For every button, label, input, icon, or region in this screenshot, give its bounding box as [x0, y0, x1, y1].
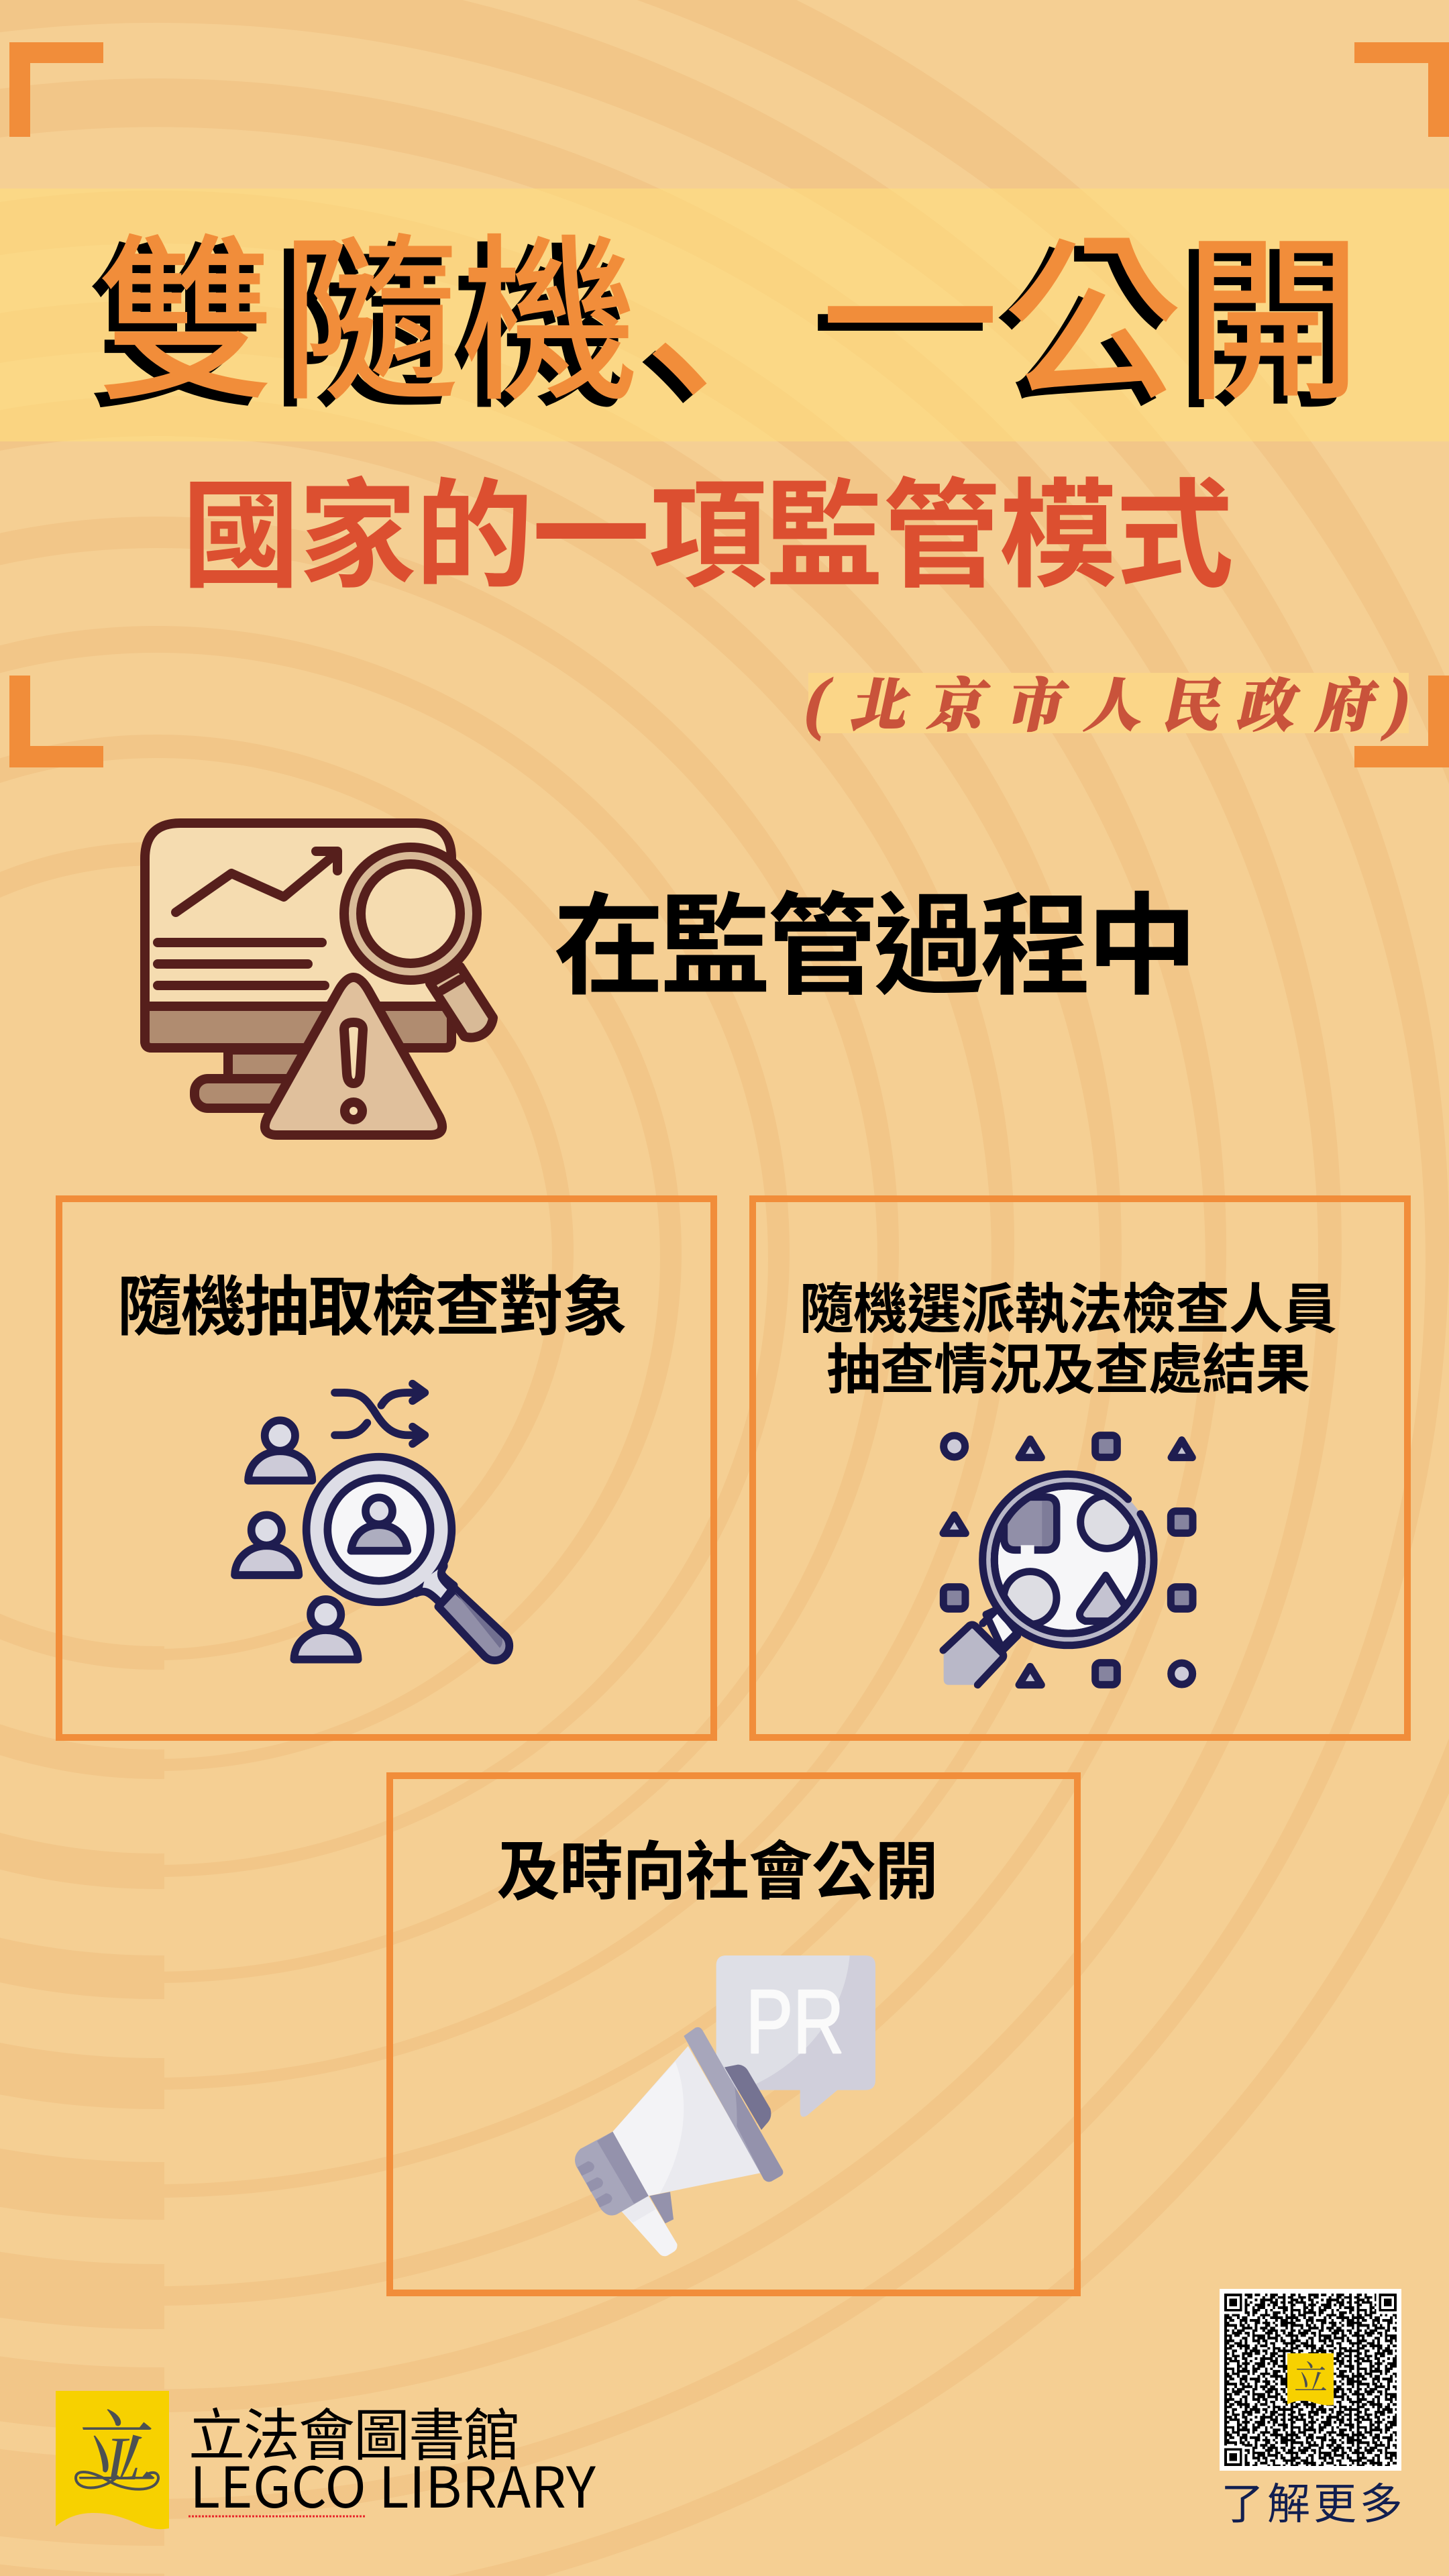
panel: timely public disclosure [390, 1776, 1077, 2293]
source callout: Beijing government: ) [1379, 663, 1418, 741]
subtitle: 國家的一項監管模式 [182, 471, 1234, 602]
corner bracket: top right [1354, 42, 1449, 137]
panel heading, two lines [800, 1280, 1337, 1401]
logo text: English name: LEGCO LIBRARY [190, 2443, 596, 2524]
icon: magnifier over shapes [943, 1436, 1193, 1685]
panel: random selection of inspection targets [59, 1199, 714, 1737]
QR centre logo [1287, 2353, 1334, 2406]
source callout: Beijing government: ( [798, 663, 838, 741]
title: 一公開 [811, 231, 1352, 430]
panel: randomly assigned inspectors and published results [753, 1199, 1407, 1737]
panel heading, two lines: 隨機選派執法檢查人員 [800, 1280, 1337, 1340]
title: 雙隨機 [97, 223, 639, 422]
panel heading: 及時向社會公開 [496, 1837, 938, 1908]
icon: people under magnifier with shuffle arrows [235, 1384, 509, 1660]
heading: during supervision: 在監管過程中 [553, 885, 1197, 1008]
QR code [1220, 2289, 1401, 2471]
icon: megaphone and PR speech bubble: PR [746, 1971, 844, 2072]
title [87, 178, 1362, 443]
QR caption: learn more: 了解更多 [1221, 2480, 1403, 2528]
logo: LegCo Library emblem [56, 2391, 169, 2529]
dotted underline [189, 2516, 366, 2517]
icon: monitor with chart, magnifier and warning [145, 823, 493, 1135]
icon: megaphone and PR speech bubble [575, 1955, 875, 2256]
title: 、 [645, 178, 822, 435]
title banner [0, 189, 1449, 441]
logo: LegCo Library emblem: L [105, 2424, 140, 2493]
QR centre logo: 立 [1294, 2359, 1328, 2397]
panel heading: 隨機抽取檢查對象 [117, 1271, 627, 1344]
logo: LegCo Library emblem: 立 [76, 2406, 158, 2496]
title: 一公開 [821, 223, 1362, 422]
source callout: Beijing government: 北京市人民政府 [845, 674, 1383, 739]
title: 、 [635, 186, 812, 443]
corner bracket: bottom left [9, 676, 103, 767]
panel heading, two lines: 抽查情況及查處結果 [826, 1340, 1310, 1401]
corner bracket: top left [9, 42, 103, 137]
logo text: Chinese name: 立法會圖書館 [189, 2404, 520, 2467]
title: 雙隨機 [87, 231, 629, 430]
corner bracket: bottom right [1354, 676, 1449, 767]
